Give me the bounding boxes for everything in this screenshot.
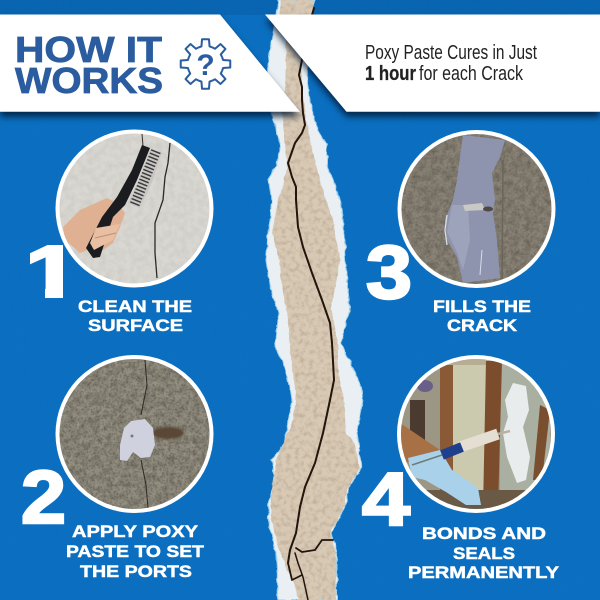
label: apply poxy paste to set the ports: PASTE TO SET xyxy=(66,542,205,561)
banner text: cure time: Poxy Paste Cures in Just xyxy=(365,42,537,64)
panel: step 3 xyxy=(366,130,557,335)
torn wall crack strip xyxy=(266,0,363,600)
label: fills the crack: FILLS THE xyxy=(433,297,531,316)
label: apply poxy paste to set the ports xyxy=(66,522,205,581)
label: apply poxy paste to set the ports: APPLY POXY xyxy=(72,522,199,541)
heading: how it works: HOW IT xyxy=(15,29,162,70)
photo: brush on cracked wall xyxy=(55,130,215,290)
panel: step 2 xyxy=(21,355,215,581)
left banner xyxy=(0,14,300,112)
heading: how it works: WORKS xyxy=(15,60,163,101)
panel: step 4 xyxy=(362,355,560,582)
label: bonds and seals permanently: SEALS xyxy=(453,544,515,563)
crack lines xyxy=(288,8,334,600)
banner text: cure time: 1 hour xyxy=(365,63,416,85)
number 4: 4 xyxy=(362,457,410,541)
label: clean the surface: SURFACE xyxy=(88,316,183,335)
label: clean the surface: CLEAN THE xyxy=(78,297,192,316)
label: bonds and seals permanently: BONDS AND xyxy=(422,524,546,543)
label: bonds and seals permanently xyxy=(408,524,560,582)
label: fills the crack xyxy=(433,297,531,335)
icon: gear with question mark: ? xyxy=(196,49,215,82)
number 3: 3 xyxy=(366,230,412,314)
photo: paste filling crack xyxy=(397,130,557,290)
label: fills the crack: CRACK xyxy=(447,316,518,335)
banner text: cure time xyxy=(365,42,537,85)
number 1: 1 xyxy=(23,230,81,314)
icon: gear with question mark xyxy=(181,39,230,89)
photo: injecting epoxy between studs xyxy=(397,355,557,520)
label: apply poxy paste to set the ports: THE PORTS xyxy=(80,562,192,581)
number 2: 2 xyxy=(21,455,66,539)
label: bonds and seals permanently: PERMANENTLY xyxy=(408,563,560,582)
torn white paper edge xyxy=(266,0,363,600)
exposed plaster xyxy=(271,0,360,600)
label: clean the surface xyxy=(78,297,192,335)
heading: how it works xyxy=(15,29,163,101)
right banner xyxy=(265,14,600,112)
photo: port set on concrete xyxy=(55,355,215,515)
banner text: cure time: for each Crack xyxy=(419,63,524,85)
panel: step 1 xyxy=(23,130,215,335)
